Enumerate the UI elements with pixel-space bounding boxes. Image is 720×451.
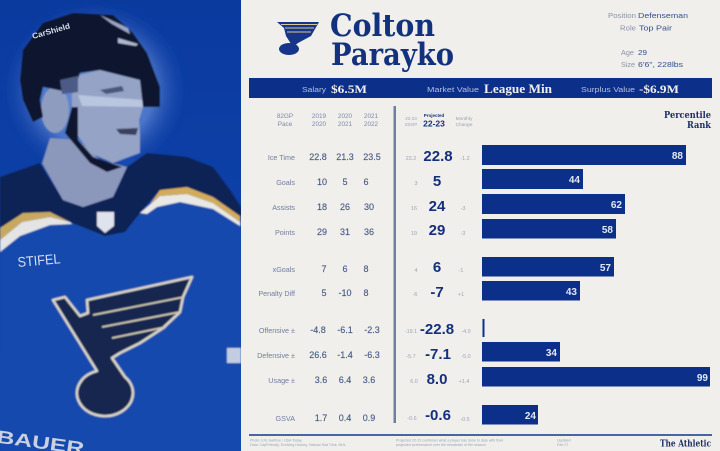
row: xGoals <box>273 257 614 276</box>
salary banner: $6.5M <box>331 83 367 96</box>
player details: Position <box>608 13 636 20</box>
row: Assists: 62 <box>611 200 622 211</box>
title: Parayko <box>331 37 454 73</box>
footer: Projected 22-23 combines what a player has done to date with their <box>396 438 504 442</box>
column headers: 2022 <box>364 121 379 128</box>
row: xGoals: xGoals <box>273 265 295 274</box>
row: Ice Time: 22.8 <box>423 148 453 165</box>
row: GSVA <box>276 405 538 424</box>
row: GSVA: 0.4 <box>339 413 351 423</box>
row: Points <box>275 219 616 239</box>
player details: Top Pair <box>639 24 673 32</box>
row: Assists: 30 <box>364 202 374 212</box>
row: Goals: Goals <box>276 178 295 187</box>
row: Offensive ± <box>259 319 484 338</box>
row: GSVA: 0.9 <box>363 413 375 423</box>
row: Defensive ±: -5.7 <box>406 354 416 360</box>
row: Offensive ±: -4.0 <box>461 329 471 335</box>
face <box>72 70 143 163</box>
row: Goals: 6 <box>363 177 369 187</box>
row: Assists: Assists <box>272 203 295 212</box>
row: Points: 29 <box>317 227 327 237</box>
footer <box>249 434 712 450</box>
title <box>330 8 454 73</box>
salary banner <box>249 78 712 98</box>
row: xGoals: 4 <box>414 268 418 274</box>
row: Goals <box>276 169 583 190</box>
shoulder stripes <box>140 194 240 226</box>
row: Ice Time: 88 <box>672 151 683 162</box>
sleeve stripe <box>227 348 241 363</box>
row: Offensive ±: -6.1 <box>337 325 353 335</box>
footer: The Athletic <box>660 440 711 450</box>
row: Usage ±: 3.6 <box>363 375 375 385</box>
row: xGoals: -1 <box>459 268 463 274</box>
row: Defensive ±: -6.3 <box>364 350 380 360</box>
row: GSVA: -0.5 <box>460 417 470 423</box>
panel: player photo <box>0 0 241 451</box>
row: GSVA: -0.6 <box>407 416 417 422</box>
row: Goals: 5 <box>342 177 348 187</box>
row: Points: 58 <box>602 225 613 236</box>
row: Ice Time: 21.3 <box>336 152 354 162</box>
column headers: Percentile <box>664 111 711 121</box>
ear <box>41 87 69 133</box>
row: Usage ±: 8.0 <box>427 371 447 388</box>
row: GSVA: GSVA <box>276 414 295 423</box>
footer: projected performance over the remainder of the season <box>396 443 486 447</box>
column headers: Pace <box>278 121 293 128</box>
jersey body <box>0 157 241 451</box>
row: xGoals: 8 <box>363 264 369 274</box>
salary banner: Market Value <box>427 87 479 94</box>
row: Usage ±: 99 <box>697 373 708 384</box>
sponsor text: STIFEL <box>17 250 61 270</box>
player details: Defenseman <box>638 11 688 20</box>
column headers <box>277 111 712 131</box>
row: Goals: 10 <box>317 177 327 187</box>
footer: Feb 27 <box>557 443 568 447</box>
row: Offensive ±: -4.8 <box>310 325 326 335</box>
column headers: 2019 <box>312 113 327 120</box>
row: Assists: 18 <box>317 202 327 212</box>
row: Penalty Diff: Penalty Diff <box>258 289 295 298</box>
player details: Role <box>620 26 636 32</box>
row: xGoals: 6 <box>433 259 441 276</box>
row: Usage ±: 3.6 <box>315 375 327 385</box>
row: Penalty Diff: 5 <box>321 288 327 298</box>
row: Defensive ±: -7.1 <box>425 346 451 363</box>
footer: Updated <box>557 438 571 442</box>
row: Points: Points <box>275 228 295 237</box>
row: xGoals: 7 <box>321 264 327 274</box>
row: xGoals: 57 <box>600 263 611 274</box>
row: Ice Time: 23.5 <box>363 152 381 162</box>
icon: NHL shield <box>97 212 114 233</box>
column headers: 2021 <box>338 121 353 128</box>
footer: Photo: Eric Hartline / USA Today <box>250 438 302 442</box>
column headers: 22-23 <box>405 116 417 121</box>
row: Penalty Diff: 43 <box>566 287 577 298</box>
footer: Data: CapFriendly, Evolving Hockey, Natural Stat Trick, NHL <box>250 443 346 447</box>
logo wing lines <box>93 297 184 338</box>
row: Assists: -3 <box>461 206 465 212</box>
column headers: 2021 <box>364 113 379 120</box>
player details: Age <box>621 50 634 57</box>
salary banner: -$6.9M <box>639 83 679 96</box>
helmet <box>20 13 160 122</box>
column headers: Change <box>456 122 473 128</box>
row: GSVA: -0.6 <box>425 407 451 424</box>
row: Usage ±: +1.4 <box>459 379 469 385</box>
row: Goals: 3 <box>414 181 418 187</box>
chin strap <box>65 107 122 172</box>
row: Ice Time <box>268 145 686 165</box>
row: Assists: 16 <box>411 206 417 212</box>
column headers: 82GP <box>277 113 293 120</box>
player details <box>608 11 688 69</box>
salary banner: Surplus Value <box>581 87 635 94</box>
row: Defensive ±: 26.6 <box>309 350 327 360</box>
salary banner: League Min <box>484 82 552 96</box>
row: Points: 29 <box>429 222 445 239</box>
row: Assists <box>272 194 625 215</box>
salary banner: Salary <box>302 87 327 94</box>
column headers: 22-23 <box>423 118 445 128</box>
row: Penalty Diff: -10 <box>338 288 352 298</box>
row: Defensive ±: -1.4 <box>337 350 353 360</box>
icon: team logo <box>277 22 319 55</box>
row: Usage ± <box>268 367 710 388</box>
row: Usage ±: 6.0 <box>410 379 418 385</box>
row: Goals: 5 <box>433 173 441 190</box>
column headers: 2020 <box>312 121 327 128</box>
column headers: Monthly <box>456 116 473 122</box>
row: Points: 36 <box>364 227 374 237</box>
row: Penalty Diff: +1 <box>458 292 464 298</box>
title: Colton <box>330 8 435 44</box>
helmet sponsor text: CarShield <box>31 21 71 41</box>
column headers: Projected <box>424 113 445 118</box>
icon: jersey blue note logo <box>53 277 192 416</box>
player details: Size <box>621 62 635 69</box>
row: Assists: 26 <box>340 202 350 212</box>
row: xGoals: 6 <box>342 264 348 274</box>
row: Usage ±: Usage ± <box>268 376 295 385</box>
row: Goals: 44 <box>569 175 580 186</box>
player details: 6'6", 228lbs <box>638 60 683 69</box>
row: Defensive ± <box>257 342 560 363</box>
row: Ice Time: Ice Time <box>268 153 295 162</box>
jersey yoke <box>0 153 241 236</box>
row: Defensive ±: 34 <box>546 348 557 359</box>
column headers: 2020 <box>338 113 353 120</box>
row: GSVA: 24 <box>525 411 536 422</box>
neck <box>42 138 127 207</box>
column headers: SSGP <box>405 122 417 127</box>
row: Points: 19 <box>411 231 417 237</box>
row: Usage ±: 6.4 <box>339 375 351 385</box>
row: Penalty Diff: -6 <box>413 292 417 298</box>
row: Offensive ±: -19.1 <box>405 329 417 335</box>
row: Points: 31 <box>340 227 350 237</box>
row: Penalty Diff: 8 <box>363 288 369 298</box>
row: Ice Time: -1.2 <box>460 156 470 162</box>
row: Ice Time: 22.8 <box>309 152 327 162</box>
row: Offensive ±: -22.8 <box>420 321 454 338</box>
column headers: Rank <box>687 121 712 131</box>
row: Penalty Diff: -7 <box>430 284 444 301</box>
row: Assists: 24 <box>429 198 446 215</box>
row: Points: -3 <box>461 231 465 237</box>
panel: stats background <box>241 0 720 451</box>
row: Defensive ±: -5.0 <box>461 354 471 360</box>
column divider <box>394 106 396 423</box>
row: Offensive ±: -2.3 <box>364 325 380 335</box>
row: Ice Time: 23.2 <box>406 156 416 162</box>
row: Penalty Diff <box>258 281 580 301</box>
row: Offensive ±: Offensive ± <box>259 326 295 335</box>
row: Defensive ±: Defensive ± <box>257 351 295 360</box>
row: GSVA: 1.7 <box>315 413 327 423</box>
player details: 29 <box>638 48 647 57</box>
